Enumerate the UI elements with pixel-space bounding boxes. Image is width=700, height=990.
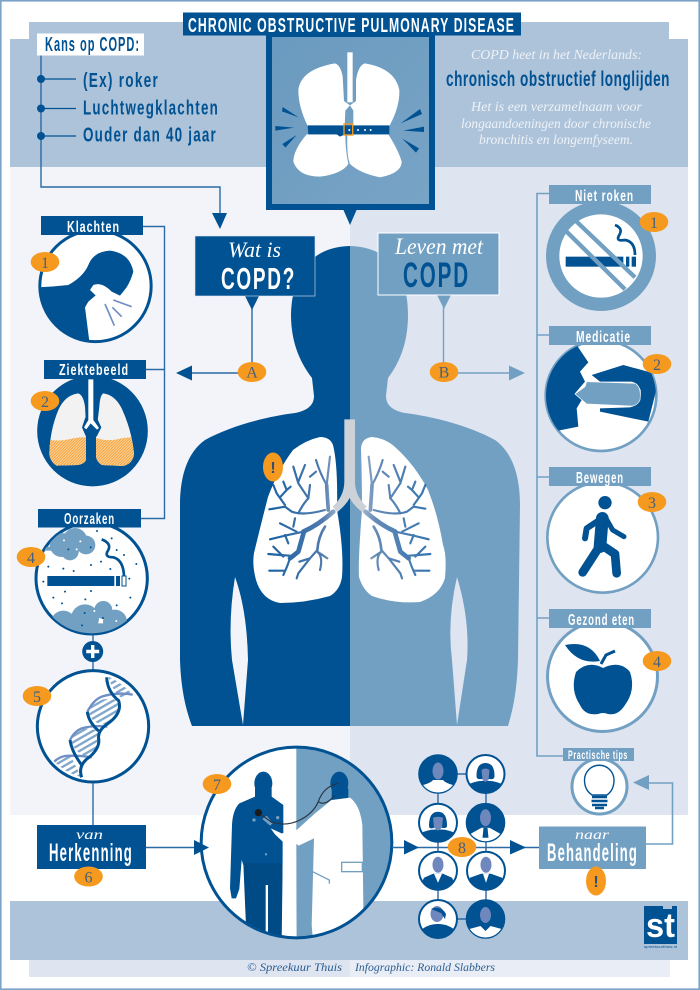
text block: COPD definition: bronchitis en longemfyseem. [479,133,633,148]
panel: genetics [23,671,149,782]
right arm gap [450,577,468,725]
arrow: B to right [430,362,525,382]
arrow: A to left: A [246,364,258,382]
icon: inhaler [540,340,660,451]
panel: naar Behandeling: naar [575,828,610,843]
badge 4: 4 [27,550,35,567]
panel: Ziektebeeld [31,360,148,486]
arrow head into team [404,840,419,854]
panel: Medicatie [540,326,671,451]
icon: cigarette and smog [36,523,147,640]
panel: bottom band [10,901,688,960]
list item: ex roker [37,70,159,92]
box pointer [343,209,357,225]
connectors [392,774,540,919]
list item: ex roker: (Ex) roker [83,70,159,92]
connector to Herkenning [92,783,94,825]
label: Klachten: Klachten [67,219,120,236]
person 1 [418,755,458,794]
callout: Leven met COPD: COPD [403,256,470,295]
badge 8 [448,837,476,857]
panel: top band [10,22,688,167]
footer credits: © Spreekuur Thuis [247,960,342,974]
person 4 [466,804,506,843]
lungs in body [253,419,446,603]
callout: exclamation: ! [593,874,599,891]
body left half [180,246,350,726]
box frame [269,34,432,207]
arrow: B to right: B [439,364,449,382]
label: Niet roken: Niet roken [575,188,634,205]
body right half [350,246,520,726]
icon: no smoking [553,208,649,304]
panel: van Herkenning [37,825,146,886]
panel: Niet roken [549,185,668,304]
left column connector [141,226,164,518]
connector to Wat is COPD [41,55,220,215]
person 3 [418,804,458,843]
text block: COPD definition: longaandoeningen door chronische [461,117,651,132]
callout: exclamation on lungs [263,452,283,482]
badge 8: 8 [458,840,466,857]
human body silhouette [180,246,520,726]
callout: Leven met COPD: Leven met [394,234,484,259]
person 5 [418,852,458,891]
panel: risk list [37,34,227,229]
heading: Kans op COPD [37,34,144,56]
list item: luchtwegklachten: Luchtwegklachten [83,98,219,120]
panel: Bewegen [547,467,666,593]
badge 2: 2 [41,394,49,411]
icon: DNA [37,671,149,782]
badge 1: 1 [41,255,49,272]
panel: Klachten [30,216,151,347]
logo: st: st [646,907,675,945]
heading: Kans op COPD: Kans op COPD: [45,34,140,56]
left lung [253,437,342,603]
icon: walking person [547,482,658,593]
person 6 [466,852,506,891]
badge 2: 2 [653,357,661,374]
arrow: Behandeling to tips [633,775,672,844]
arrow: A to left [176,362,266,382]
panel: naar Behandeling [539,826,646,896]
panel: footer strip [29,960,670,977]
label: Ziektebeeld: Ziektebeeld [59,362,129,379]
badge 7 [203,774,231,794]
center top box with belted lungs [269,34,432,225]
label: Practische tips: Practische tips [568,748,628,762]
panel: care team [392,755,540,939]
arrow head out of team [510,840,526,854]
badge 5: 5 [33,689,41,706]
person 8 [466,900,506,939]
panel: doctor and patient [194,745,396,945]
logo: st: spreekuurthuis.nl [644,944,677,949]
callout: Wat is COPD: Wat is [228,237,281,262]
badge 3: 3 [648,495,656,512]
panel: left background [10,167,350,815]
callout: Wat is COPD: COPD? [221,261,296,296]
icon: lungs with fluid [37,376,148,486]
list item: ouder dan 40 jaar: Ouder dan 40 jaar [83,124,217,146]
bronchial tree [268,419,430,578]
badge 6: 6 [84,870,92,886]
label: Medicatie: Medicatie [576,329,631,346]
text block: COPD definition: COPD heet in het Nederlands: [471,48,642,63]
footer credits: Infographic: Ronald Slabbers [354,960,495,974]
label: Oorzaken: Oorzaken [64,511,115,528]
icon: coughing person [38,235,153,344]
label: Gezond eten: Gezond eten [568,612,635,629]
callout: Wat is COPD [195,236,315,362]
panel: van Herkenning: van [76,828,103,843]
panel: Practische tips [563,748,634,814]
person 2 [466,755,506,794]
arrow head into doctor circle [194,840,209,855]
list item: luchtwegklachten [37,98,219,120]
panel: Oorzaken [17,509,147,640]
arrow: Herkenning to doctor [146,846,196,848]
list item: ouder dan 40 jaar [37,124,217,146]
panel: right background [350,167,688,815]
person 7 [418,900,458,939]
icon: belted lungs [275,52,424,177]
panel: van Herkenning: Herkenning [49,839,133,867]
icon: light bulb [572,759,627,814]
right lung [359,437,446,602]
callout: Leven met COPD [378,233,499,362]
badge 1: 1 [650,215,658,232]
callout: exclamation on lungs: ! [270,460,276,477]
title [183,12,521,37]
footer credits [247,960,495,974]
text block: COPD definition: Het is een verzamelnaam voor [470,100,643,115]
text block: COPD definition [446,48,670,148]
label: Bewegen: Bewegen [576,470,624,487]
badge 7: 7 [213,777,221,794]
left arm gap [231,577,248,725]
badge 4: 4 [653,654,661,671]
icon: apple [548,622,658,732]
panel: Gezond eten [548,609,671,732]
right column connector [537,194,563,756]
icon: plus [82,635,103,670]
arrow: into Wat is COPD [212,213,227,229]
